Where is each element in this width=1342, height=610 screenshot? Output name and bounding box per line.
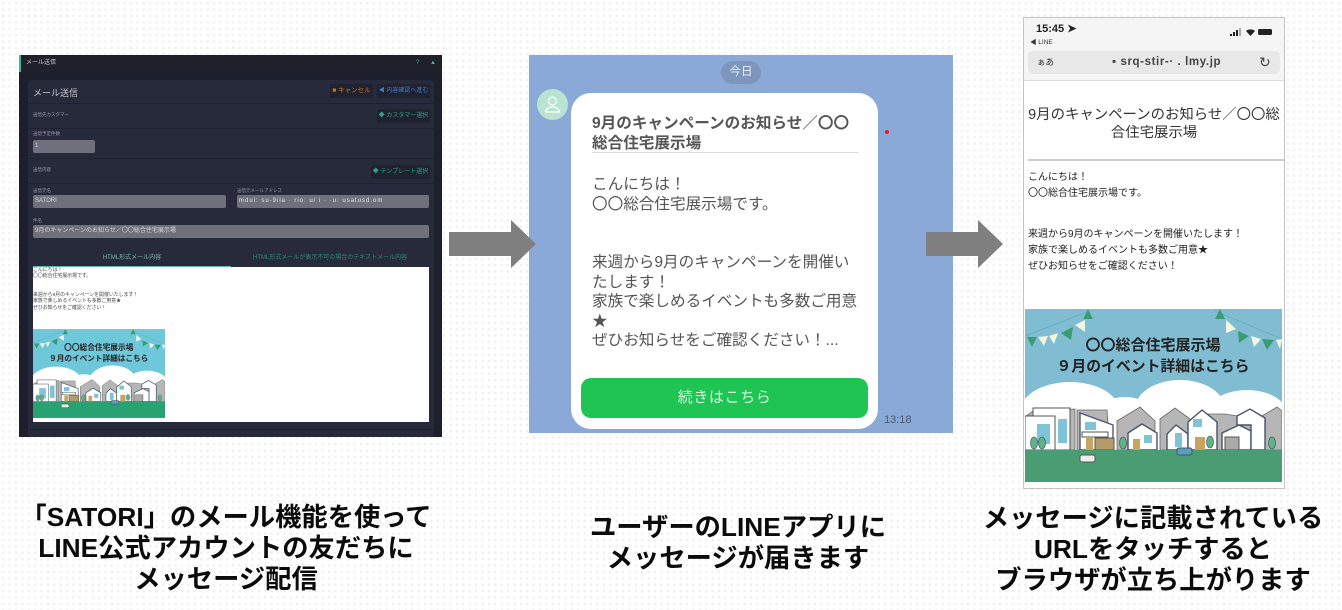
back to LINE: ◀ LINE (1030, 39, 1053, 46)
body line: 来週から9月のキャンペーンを開催いたします！ (1028, 229, 1243, 240)
field: sender: SATORI (35, 198, 57, 204)
preview text: ぜひお知らせをご確認ください！ (33, 306, 106, 311)
event banner: 〇〇総合住宅展示場 (64, 342, 134, 352)
form heading: メール送信 (33, 88, 78, 98)
confirm button (377, 84, 430, 98)
caption: step 1: メッセージ配信 (134, 564, 318, 594)
message bubble (571, 93, 878, 429)
body line: 家族で楽しめるイベントも多数ご用意★ (1028, 245, 1208, 256)
tab: text mail: HTML形式メールが表示不可の場合のテキストメール内容 (253, 255, 407, 261)
caption: step 1: 「SATORI」のメール機能を使って (20, 502, 432, 532)
cancel button (330, 84, 373, 98)
red dot (885, 130, 889, 134)
title rule (592, 152, 859, 153)
label: recipients: 送信先カスタマー (33, 112, 69, 117)
field: count: 1 (35, 143, 38, 149)
url: ▪ srq-stir-· . lmy.jp (1112, 56, 1221, 68)
icon: avatar (537, 89, 568, 120)
body line: ぜひお知らせをご確認ください！ (1028, 261, 1178, 272)
message body: ★ (592, 312, 608, 330)
arrow: step 2 to 3 (926, 220, 1003, 268)
title rule (1028, 159, 1284, 161)
date pill (721, 61, 761, 84)
label: sender: 送信元名 (33, 188, 51, 193)
caption: step 3: URLをタッチすると (1034, 534, 1272, 564)
label: sender address: 送信元メールアドレス (237, 188, 282, 193)
tab: html mail (33, 254, 231, 267)
page title: 9月のキャンペーンのお知らせ／〇〇総 (1028, 107, 1280, 123)
field: sender (33, 195, 226, 208)
field: count (33, 140, 95, 153)
label: subject: 件名 (33, 218, 42, 223)
label: count: 送信予定件数 (33, 131, 60, 136)
green button: 続きはこちら (678, 389, 771, 406)
caption: step 1: LINE公式アカウントの友だちに (38, 533, 414, 563)
event banner: 〇〇総合住宅展示場 (1085, 336, 1221, 354)
caption: step 3 (983, 503, 1323, 595)
page title: 合住宅展示場 (1111, 125, 1197, 141)
body line: こんにちは！ (1028, 172, 1088, 183)
preview text: 〇〇総合住宅展示場です。 (33, 274, 91, 279)
message body: たします！ (592, 274, 670, 290)
event banner (1025, 309, 1282, 482)
message body: 来週から9月のキャンペーンを開催い (592, 254, 849, 271)
arrow: step 1 to 2 (449, 220, 536, 268)
label: content: 送信内容 (33, 167, 51, 172)
caption: step 2 (590, 512, 886, 573)
event banner (33, 329, 165, 418)
preview text (33, 267, 138, 311)
panel: phone browser screen (1023, 17, 1285, 489)
date pill: 今日 (730, 66, 752, 78)
caption: step 3: メッセージに記載されている (983, 503, 1323, 533)
top bar: メール送信 (26, 60, 56, 66)
caption: step 2: ユーザーのLINEアプリに (590, 512, 886, 542)
caption: step 2: メッセージが届きます (607, 543, 869, 573)
customer select button (377, 109, 430, 123)
clock: 15:45 ➤ (1036, 23, 1076, 35)
message body: 家族で楽しめるイベントも多数ご用意 (592, 293, 857, 310)
tab: html mail: HTML形式メール内容 (103, 255, 161, 261)
message title: 総合住宅展示場 (592, 135, 701, 152)
top bar icons: ? ▲ (416, 60, 436, 66)
preview text: 来週から9月のキャンペーンを開催いたします！ (33, 293, 138, 298)
template select button (371, 165, 430, 179)
form card (28, 80, 434, 437)
page title (1028, 106, 1280, 141)
preview text: 家族で楽しめるイベントも多数ご用意★ (33, 299, 121, 304)
message title (592, 114, 849, 152)
field: subject (33, 225, 429, 238)
mail preview (33, 267, 429, 422)
panel: SATORI mail screen (19, 55, 442, 437)
confirm button: ◀ 内容確認へ進む (379, 88, 428, 94)
icon: reload: ↻ (1259, 54, 1271, 70)
message body: 〇〇総合住宅展示場です。 (592, 196, 778, 212)
message title: 9月のキャンペーンのお知らせ／〇〇 (592, 115, 849, 132)
body line: 〇〇総合住宅展示場です。 (1028, 188, 1147, 199)
reader label: ぁあ (1037, 57, 1054, 67)
caption: step 3: ブラウザが立ち上がります (995, 565, 1311, 595)
field: subject: 9月のキャンペーンのお知らせ／〇〇総合住宅展示場 (35, 228, 176, 234)
cancel button: ■ キャンセル (332, 87, 371, 94)
template select button: ◆ テンプレート選択 (373, 169, 428, 175)
preview text: こんにちは！ (33, 268, 62, 273)
caption: step 1 (20, 502, 432, 594)
field: sender address (237, 195, 429, 208)
field: sender address: mdui: su-9ila · rio: u/ i · ·u: usatusd.om (239, 198, 383, 204)
message body: こんにちは！ (592, 176, 686, 193)
event banner: ９月のイベント詳細はこちら (1056, 357, 1250, 375)
icon: status indicators (1230, 28, 1272, 36)
timestamp: 13:18 (884, 414, 912, 426)
top bar (19, 55, 442, 72)
customer select button: ◆ カスタマー選択 (379, 113, 428, 119)
event banner: ９月のイベント詳細はこちら (49, 353, 148, 363)
address bar (1028, 51, 1280, 74)
browser chrome (1024, 18, 1284, 81)
message body: ぜひお知らせをご確認ください！... (592, 332, 839, 349)
panel: LINE chat screen (529, 55, 953, 433)
green button (581, 378, 868, 418)
message body (592, 176, 857, 349)
